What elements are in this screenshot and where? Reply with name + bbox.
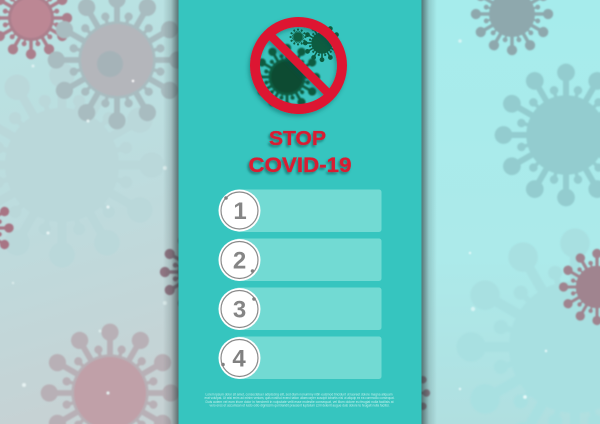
sign interior <box>258 26 338 106</box>
list item 1: 1 <box>233 198 247 225</box>
virus pattern: left side <box>0 0 178 424</box>
list item 4 <box>218 336 382 379</box>
icon: small green virus <box>289 28 307 46</box>
footer text block: vero eros et accumsan et iusto odio dignissim qui blandit praesent luptatum zzril delenit augue duis dolore te feugait nulla facilisi. <box>210 404 390 408</box>
list item 2: 2 <box>233 248 246 274</box>
title <box>248 128 352 177</box>
footer text block: erat volutpat. Ut wisi enim ad minim veniam, quis nostrud exerci tation ullamcorper suscipit lobortis nisl ut aliquip ex ea commodo consequat. <box>204 396 395 400</box>
footer text block: Lorem ipsum dolor sit amet, consectetuer adipiscing elit, sed diam nonummy nibh euismod tincidunt ut laoreet dolore magna aliquam <box>206 392 393 396</box>
footer text block <box>204 392 395 408</box>
background: left <box>0 0 200 424</box>
icon: no-virus sign <box>254 22 342 110</box>
list item 3 <box>218 288 382 330</box>
prohibition ring and bar <box>255 22 342 109</box>
icon: large green virus <box>254 44 320 110</box>
panel shadow: left <box>163 0 179 424</box>
list item 2 <box>218 238 382 281</box>
list item 3: 3 <box>233 296 246 324</box>
title: STOP <box>269 128 326 150</box>
title: COVID-19 <box>248 154 352 177</box>
footer text block: Duis autem vel eum iriure dolor in hendrerit in vulputate velit esse molestie consequat, vel illum dolore eu feugiat nulla facilisis at <box>206 400 394 404</box>
list item 4: 4 <box>232 346 246 372</box>
central panel <box>178 0 422 424</box>
background: right <box>400 0 600 424</box>
panel shadow: right <box>421 0 437 424</box>
list item 1 <box>218 190 382 232</box>
virus pattern: right side <box>422 0 600 410</box>
icon: medium green virus <box>303 24 341 62</box>
